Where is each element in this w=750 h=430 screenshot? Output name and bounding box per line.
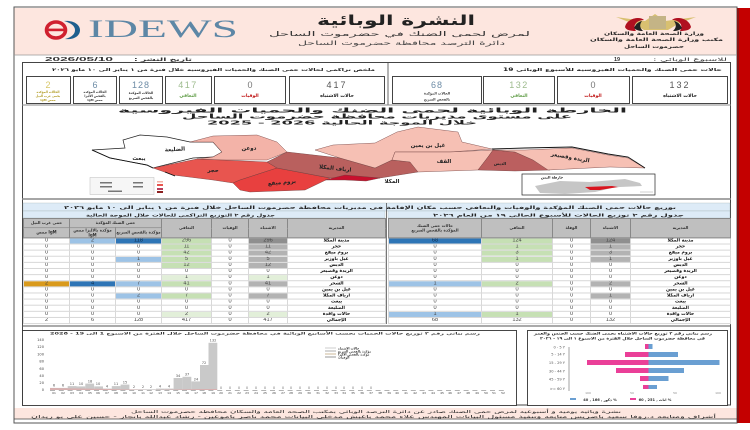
inset map of Yemen [522,174,655,195]
value axis labels: 50 [673,391,677,395]
table: current week distribution by district [388,218,731,324]
week axis labels: 16 [185,391,189,395]
bar value labels: 132 [210,339,216,343]
week axis labels: 45 [440,391,444,395]
district: Ghayl Bin Yamin [315,127,492,168]
age labels: >= 60 Y [550,387,566,391]
y axis labels: 20 [39,381,45,385]
week axis labels: 28 [289,391,293,395]
week axis labels: 14 [167,391,171,395]
tables main heading [23,203,730,211]
tables main heading: توزيع حالات حمى الضنك المؤكدة والوفيات والتعافي حسب مكان الإقامة في مديريات محافظة حضرموت الساحل خلال فترة من ١ يناير الى ١٠ مايو ٢٠٢٦ [64,205,677,211]
table: cumulative distribution by district: المديرية [329,225,344,230]
week axis labels: 30 [307,391,311,395]
table: current week distribution by district: الريدة وقصيعر [664,269,697,274]
KPI: deaths: الوفيات [584,94,602,99]
table: cumulative distribution by district: غيل باوزير [324,257,349,262]
pyramid title: في محافظة حضرموت الساحل خلال الفترة من الاسبوع ١ الى ١٩ - ٢٠٢٦ [540,336,706,340]
publication date row [45,57,728,63]
zero value labels: 0 [326,386,328,390]
district labels: الضليعة [165,146,185,154]
zero value labels: 0 [299,386,301,390]
table: current week distribution by district: المؤكدة بالفحص السريع [411,227,459,232]
week axis labels: 17 [194,391,198,395]
table: current week distribution by district: بروم ميفع [669,251,692,256]
panel: cumulative summary [26,67,384,104]
y axis labels: 0 [42,388,45,392]
table: cumulative distribution by district: بروم ميفع [325,251,348,256]
table: cumulative distribution by district: حمى الضنك المؤكدة [96,220,135,225]
baseline [50,390,505,392]
district labels: بروم ميفع [268,179,296,187]
table: cumulative distribution by district: التعافي [179,225,194,230]
emblem of Yemen [616,14,696,31]
value axis labels: 50 [630,391,634,395]
KPI: West Nile: 2 [45,80,51,90]
KPI: deaths: الوفيات [241,94,259,99]
week axis labels: 25 [263,391,267,395]
KPI: confirmed: بالفحص السريع [424,98,450,102]
KPI: suspected: 132 [669,80,691,90]
table: cumulative distribution by district: غيل بن يمين [322,287,351,292]
district labels: الديس [494,161,507,166]
week axis labels: 07 [105,391,109,395]
KPI: confirmed [392,76,482,104]
district labels: دوعن [242,146,257,152]
zero value labels: 0 [220,386,222,390]
left table heading [23,211,385,218]
KPI: recovered [484,76,554,104]
bar value labels: 2 [142,385,144,389]
district labels: ارياف المكلا [319,163,352,174]
district: Ash-Shihr and Ad-Dis [478,150,550,171]
weekly heading: حالات حمى الضنك والحميات الفيروسية للأسبوع الوبائي 19 [503,67,722,72]
week axis labels: 49 [475,391,479,395]
zero value labels: 0 [308,386,310,390]
week axis labels: 50 [484,391,488,395]
week axis labels [52,391,505,395]
KPI: deaths: 0 [247,80,253,90]
KPI: recovered: التعافي [179,94,197,99]
KPI: ELISA confirmed: 6 [92,80,98,90]
table: current week distribution by district: غيل باوزير [668,257,693,262]
publication date row: تاريخ النشر : [134,57,192,63]
table: current week distribution by district: حالات حمى الضنك [417,223,453,228]
week axis labels: 23 [245,391,249,395]
KPI: ELISA confirmed [74,76,116,104]
zero value labels: 0 [335,386,337,390]
zero value labels: 0 [246,386,248,390]
value axis labels: 100 [585,391,591,395]
inset title: خارطة اليمن [541,176,564,180]
bar value labels: 10 [96,382,101,386]
district: Al-Qaf [392,150,493,172]
value axis labels: 100 [715,391,721,395]
table: current week distribution by district: الديس [673,263,688,268]
district: Yabuth and Dhlee'ah [92,135,222,168]
gender legend [570,398,672,402]
KPI: recovered: 417 [178,80,198,90]
bar value labels [53,339,216,389]
footer line 1: نشرة وبائية يومية و أسبوعية لمرض حمى الضنك صادر عن دائرة الترصد الوبائي بمكتب الصحة العامة والسكان محافظة حضرموت الساحل [131,408,621,414]
KPI: deaths: 0 [590,80,596,90]
footer [14,408,737,419]
zero value labels: 0 [264,386,266,390]
week axis labels: 27 [281,391,285,395]
week axis labels: 22 [237,391,241,395]
chart title: رسم بياني رقم ٢ توزيع حالات الحميات بحسب الأسابيع الوبائية في محافظة حضرموت الساحل خلال الفترة من الاسبوع 1 الى 19 - 2026 [50,330,480,336]
KPI: recovered [166,76,212,104]
KPI: rapid test confirmed: بالفحص السريع [129,96,153,100]
bars [50,343,217,390]
week axis labels: 04 [79,391,83,395]
week axis labels: 51 [492,391,496,395]
district: Mukalla rural and Ghayl Bawazir [267,152,418,178]
week axis labels: 32 [325,391,329,395]
week axis labels: 05 [88,391,92,395]
KPI: West Nile: IgM ممص [40,98,56,102]
week axis labels: 20 [219,391,223,395]
KPI: recovered: التعافي [510,94,528,99]
week axis labels: 18 [202,391,206,395]
low series band [50,388,217,390]
table: cumulative distribution by district: الديس [329,263,344,268]
week axis labels: 48 [466,391,470,395]
week axis labels: 41 [404,391,408,395]
table: cumulative distribution by district: الوفيات [222,225,238,230]
bar value labels: 2 [133,385,135,389]
publication date row: 19 [614,57,620,63]
district labels [132,143,590,187]
week axis labels: 12 [149,391,153,395]
KPI: West Nile: الحالات المؤكدة [36,90,60,94]
zero value labels: 0 [229,386,231,390]
age labels: 45 - 59 Y [549,378,566,382]
KPI: West Nile: بحمى غرب النيل [36,94,60,98]
zero value labels: 0 [290,386,292,390]
KPI: rapid test confirmed: الحالات المؤكدة [129,91,153,95]
zero value labels: 0 [255,386,257,390]
week axis labels: 44 [431,391,435,395]
week axis labels: 26 [272,391,276,395]
bar value labels: 34 [176,374,181,378]
y axis labels: 40 [39,374,45,378]
y axis labels: 140 [37,338,45,342]
week axis labels: 29 [298,391,302,395]
week axis labels: 06 [96,391,100,395]
week axis labels: 15 [176,391,180,395]
ministry text: وزارة الصحة العامة والسكان [604,31,704,37]
inner frame [22,62,730,405]
table: current week distribution by district: التعافي [510,225,524,230]
age labels [549,346,566,391]
bar value labels: 6 [62,384,65,388]
week axis labels: 34 [342,391,346,395]
week axis labels: 01 [52,391,56,395]
table: current week distribution by district: الاشتباه [603,225,618,230]
KPI: suspected [632,76,728,104]
week axis labels: 31 [316,391,320,395]
district: Broom Mayfa [233,168,330,192]
table: current week distribution by district: حجر [676,245,685,250]
chart legend: الوفيات [338,356,349,360]
age labels: 0 - 5 Y [554,346,566,350]
table: cumulative distribution by district: الإجمالي [327,318,346,323]
y axis labels: 100 [37,352,45,356]
week axis labels: 37 [369,391,373,395]
district labels: حجر [206,168,219,174]
table: current week distribution by district: يبعث [675,300,686,305]
panel: epidemic curve chart [22,330,516,406]
district map [90,127,645,194]
KPI: deaths [558,76,630,104]
panel: population pyramid [528,330,728,406]
age labels: 15 - 29 Y [549,361,566,365]
zero value labels: 0 [370,386,372,390]
week axis labels: 11 [141,391,145,395]
week axis labels: 10 [132,391,136,395]
age labels: 30 - 44 Y [549,370,566,374]
chart legend [325,346,371,360]
summary heading: ملخص تراكمي لحالات حمى الضنك والحميات الفيروسية خلال فترة من ١ يناير الى ١٠ مايو ٢٠٢٦ [52,67,376,72]
footer line 2: أشراف ومتابعة د.روفا سعيد باضريس متابعة وتنفيذ مسئول البيانات المهندس علاء محمد باغبش مدخلي البيانات محمد ناصر باموعين - رشاد عبدالله بانجار - حسين علي بو ريدان [31,413,716,419]
bar value labels: 24 [194,377,199,381]
table: cumulative distribution by district: ارياف المكلا [323,293,350,299]
week axis labels: 40 [395,391,399,395]
bar value labels: 6 [53,384,56,388]
bar value labels: 4 [159,384,162,388]
bar value labels: 11 [114,382,118,386]
KPI: suspected: حالات الاشتباه [320,93,354,99]
map heading: خلال الموجة الحالية 2026 - 2025 [207,120,477,126]
y axis labels: 60 [39,367,45,371]
KPI: suspected: 417 [326,80,348,90]
KPI: ELISA confirmed: بالفحص الاليزا [84,94,106,98]
KPI: recovered: 132 [509,80,529,90]
bar value labels: 15 [123,380,127,384]
zero value labels: 0 [238,386,240,390]
KPI: confirmed: 68 [431,80,443,90]
bar value labels: 2 [150,385,152,389]
map legend [90,178,163,194]
bar value labels: 4 [106,384,109,388]
y axis labels: 80 [39,360,45,364]
ministry text: مكتب وزارة الصحة العامة والسكان [590,37,723,43]
table: cumulative distribution by district: دوعن [330,275,343,280]
week axis labels: 02 [61,391,65,395]
bar value labels: 37 [185,372,189,376]
bar value labels: 18 [88,380,93,384]
y axis labels [37,338,45,392]
district: Doan [190,135,287,160]
table: cumulative distribution by district: حجر [332,245,341,250]
logo: eIDEWS: IDEWS [88,16,238,43]
table: current week distribution by district: الإجمالي [671,318,690,323]
district labels: الريدة وقصيعر [549,152,590,164]
pyramid title [533,332,712,340]
week axis labels: 35 [351,391,355,395]
table: current week distribution by district: ارياف المكلا [667,293,694,299]
gender legend: اناث , 251 , 60 % [639,398,672,402]
week axis labels: 46 [448,391,452,395]
table: cumulative distribution by district: مؤكدة بالفحص السريع [116,229,161,235]
table: cumulative distribution by district: حالات وافدة [323,312,350,317]
pyramid bars: female [587,344,648,389]
map heading: على مستوى مديريات محافظة حضرموت الساحل [182,112,572,120]
zero value labels: 0 [282,386,284,390]
week axis labels: 36 [360,391,364,395]
zero value labels: 0 [273,386,275,390]
week axis labels: 09 [123,391,127,395]
table: cumulative distribution by district: حمى غرب النيل [31,220,62,225]
district labels: غيل بن يمين [411,143,446,149]
bar value labels: 11 [70,382,74,386]
ministry text [590,31,723,50]
table: cumulative distribution by district: الاشتباه [260,225,276,230]
table: cumulative distribution by district: ممص IgM [36,229,57,235]
zero value labels [220,386,372,390]
pyramid title: رسم بياني رقم ٢ توزيع حالات الاشتباه بحمى الضنك حسب الجنس والعمر [533,332,712,336]
week axis labels: 19 [211,391,215,395]
header band [14,8,737,55]
table: cumulative distribution by district [23,218,386,324]
red side bar [737,8,750,423]
ministry text: حضرموت الساحل [624,45,684,50]
table: cumulative distribution by district: يبعث [331,300,342,305]
week axis labels: 03 [70,391,74,395]
bar value labels: 10 [79,382,84,386]
zero value labels: 0 [352,386,354,390]
week axis labels: 08 [114,391,118,395]
bar value labels: 4 [168,384,171,388]
KPI: ELISA confirmed: IgM ممص [87,98,103,102]
table: current week distribution by district: مدينة المكلا [667,238,694,244]
KPI: deaths [214,76,286,104]
map heading: الخارطة الوبائية لحمى الضنك والحميات الفيروسية [118,106,627,114]
week axis labels: 21 [228,391,232,395]
zero value labels: 0 [361,386,363,390]
table: current week distribution by district: دوعن [674,275,687,280]
bar value labels: 72 [202,361,206,365]
table: cumulative distribution by district: الريدة وقصيعر [320,269,353,274]
table: current week distribution by district: المديرية [673,225,688,230]
KPI: suspected [290,76,384,104]
bulletin title [269,13,530,47]
bulletin title: لمرض لحمى الضنك في حضرموت الساحل [269,30,530,38]
logo: eIDEWS [46,16,238,43]
y axis labels: 120 [37,345,45,349]
zero value labels: 0 [317,386,319,390]
district labels: يبعث [132,156,146,162]
week axis labels: 47 [457,391,461,395]
table: cumulative distribution by district: مدينة المكلا [324,238,350,244]
publication date row: للاسبوع الوبائي : [653,57,728,63]
table: current week distribution by district: الشحر [673,281,688,286]
week axis labels: 39 [387,391,391,395]
KPI: rapid test confirmed [120,76,162,104]
pyramid bars: male [648,344,720,389]
bulletin title: دائرة الترصد محافظة حضرموت الساحل [298,40,506,47]
bulletin title: النشرة الوبائية [317,13,475,29]
table: current week distribution by district: الوفاة [566,225,577,230]
week axis labels: 38 [378,391,382,395]
table: cumulative distribution by district: الشحر [329,281,344,286]
week axis labels: 42 [413,391,417,395]
zero value labels: 0 [343,386,345,390]
district: Mukalla city [325,175,380,181]
map heading [118,106,627,126]
chart legend: حالات الاشتباه [338,346,359,350]
district: Hajar [153,159,277,183]
week axis labels: 52 [501,391,505,395]
district: Qusay'ir and Raydah [493,148,645,170]
week axis labels: 43 [422,391,426,395]
KPI: West Nile [26,76,70,104]
district labels: القف [437,159,451,165]
table: cumulative distribution by district: الضليعة [328,306,345,311]
panel: weekly summary [392,67,728,104]
KPI: rapid test confirmed: 128 [132,80,150,90]
table: current week distribution by district: الضليعة [672,306,689,311]
table: current week distribution by district: غيل بن يمين [666,287,695,292]
KPI: ELISA confirmed: الحالات المؤكدة [83,90,107,94]
right table heading [388,211,730,218]
age labels: 5 - 14 Y [551,352,566,356]
value axis labels [585,391,721,395]
coast outline [92,147,645,176]
chart legend: مؤكدة بالفحص السريع [338,350,371,354]
publication date row: 2026/05/10 [45,57,113,63]
gender legend: ذكور , 166 , 40 % [583,398,617,402]
week axis labels: 33 [334,391,338,395]
week axis labels: 24 [254,391,258,395]
KPI: suspected: حالات الاشتباه [663,93,697,99]
district labels: المكلا [384,178,400,185]
left table heading: جدول رقم ٢ التوزيع التراكمي للحالات خلال الموجة الحالية [86,212,275,218]
KPI: confirmed: الحالات المؤكدة [424,92,450,96]
week axis labels: 13 [158,391,162,395]
right table heading: جدول رقم ٢ توزيع الحالات للأسبوع الحالي ١٩ من العام ٢٠٢٦ [433,212,684,218]
table: current week distribution by district: حالات وافدة [667,312,694,317]
chart legend: مؤكدة بالفحص الاليزا [338,352,370,356]
